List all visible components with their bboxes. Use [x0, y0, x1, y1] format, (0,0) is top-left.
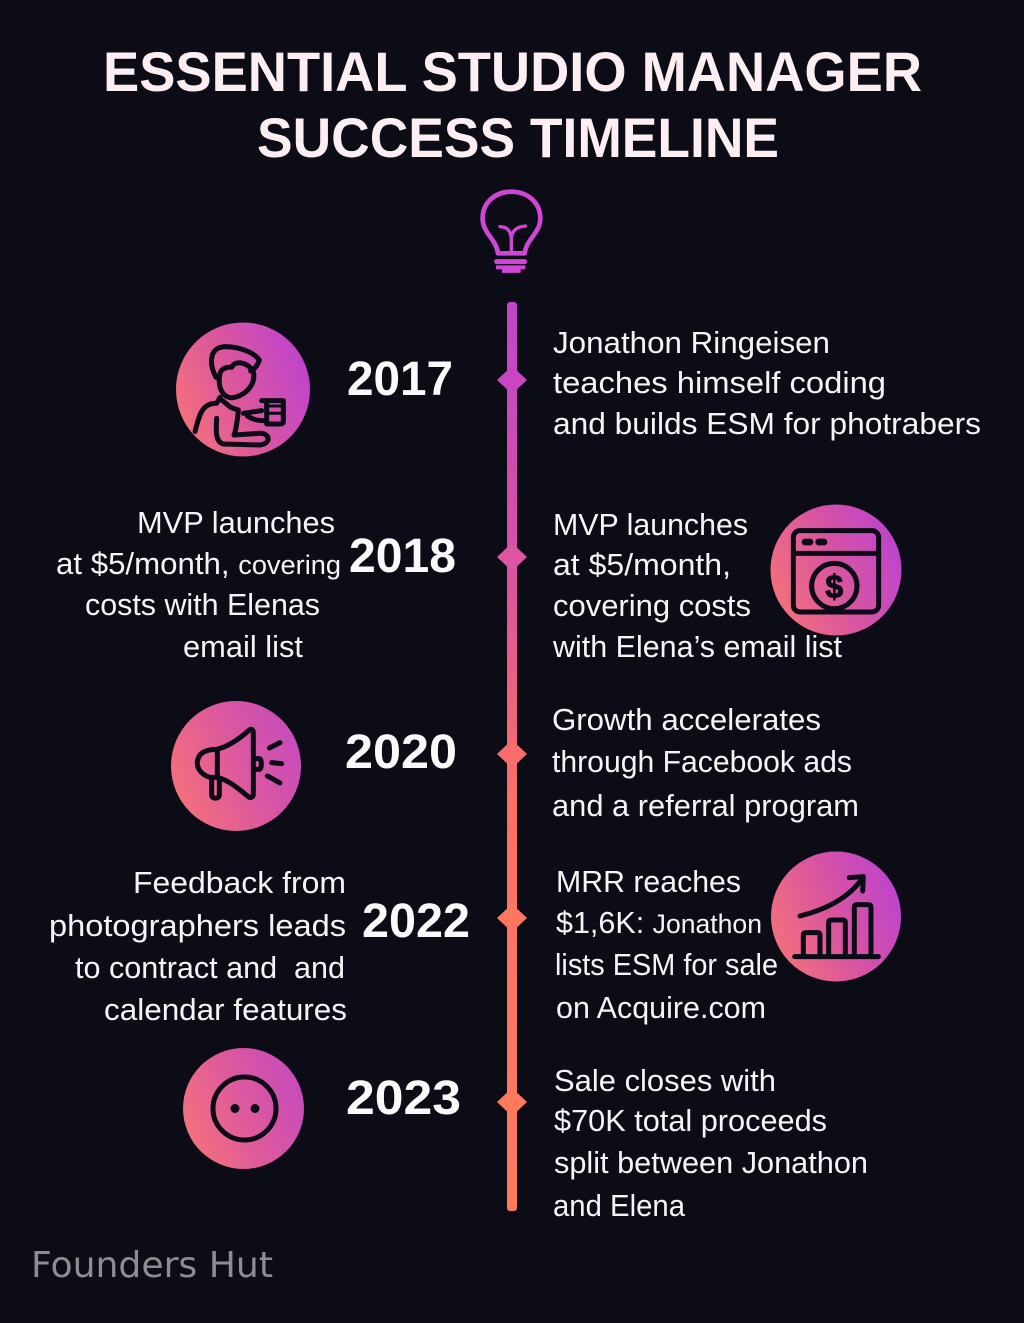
title: SUCCESS TIMELINE [257, 106, 779, 169]
text: 2022 right description: lists ESM for sale [555, 947, 778, 982]
year: 2023: 2023 [346, 1072, 461, 1125]
text: 2018 last line: with Elena’s email list [552, 629, 842, 664]
icon: browser with dollar coin [770, 504, 902, 636]
marker: 2023 [497, 1088, 527, 1116]
marker: 2018 [497, 543, 527, 571]
text: 2017 description [553, 325, 981, 441]
text: 2018 left description: MVP launches [137, 505, 335, 540]
text: 2018 right description: MVP launches [553, 507, 748, 542]
year: 2018: 2018 [349, 530, 456, 583]
watermark: Founders Hut [31, 1245, 273, 1286]
text: 2023 description: Sale closes with [554, 1063, 776, 1098]
text: 2017 description: Jonathon Ringeisen [553, 325, 830, 360]
text: 2022 right description: MRR reaches [556, 864, 741, 899]
text: 2022 right description: on Acquire.com [556, 990, 766, 1025]
text: 2018 right description: at $5/month, [553, 547, 731, 582]
text: 2022 right description [555, 864, 778, 1025]
icon: person at desk [176, 322, 310, 456]
text: 2020 description [552, 702, 859, 823]
text: 2018 left description [56, 505, 341, 664]
text: 2020 description: Growth accelerates [552, 702, 821, 737]
text: 2018 left description: costs with Elenas [85, 587, 320, 622]
text: 2018 right description: covering costs [553, 588, 751, 623]
panel: 2020 [171, 701, 859, 831]
text: 2023 description: $70K total proceeds [554, 1103, 827, 1138]
text: 2022 right description: $1,6K: Jonathon [556, 905, 762, 940]
year: 2022: 2022 [362, 895, 470, 948]
text: 2022 left description: photographers leads [49, 908, 346, 943]
text: 2023 description: split between Jonathon [554, 1145, 868, 1180]
text: 2022 left description [49, 865, 347, 1027]
panel: 2018 [56, 504, 902, 664]
text: 2018 left description: email list [183, 629, 303, 664]
text: 2023 description [553, 1063, 868, 1223]
text: 2022 left description: to contract and and [75, 950, 345, 985]
panel: 2022 [49, 852, 901, 1027]
marker: 2022 [497, 904, 527, 932]
panel: 2023 [183, 1048, 868, 1223]
icon: rising bar chart [771, 852, 901, 982]
text: 2023 description: and Elena [553, 1188, 686, 1223]
year: 2017: 2017 [347, 353, 453, 406]
marker: 2020 [497, 740, 527, 768]
text: 2018 right description [553, 507, 751, 623]
icon: circle with two dots [183, 1048, 304, 1169]
panel: 2017 [176, 322, 981, 456]
text: 2022 left description: Feedback from [133, 865, 346, 900]
timeline line [497, 302, 527, 1211]
text: 2018 left description: at $5/month, covering [56, 546, 341, 581]
text: 2017 description: teaches himself coding [553, 365, 886, 400]
icon: megaphone [171, 701, 301, 831]
year: 2020: 2020 [345, 726, 457, 779]
icon: light bulb [483, 192, 540, 271]
text: 2020 description: through Facebook ads [552, 744, 852, 779]
text: 2020 description: and a referral program [552, 788, 859, 823]
text: 2017 description: and builds ESM for photrabers [553, 406, 981, 441]
icon: browser with dollar coin: $ [825, 568, 843, 604]
text: 2022 left description: calendar features [104, 992, 347, 1027]
title: ESSENTIAL STUDIO MANAGER [103, 40, 922, 103]
title [103, 40, 922, 169]
marker: 2017 [497, 366, 527, 394]
